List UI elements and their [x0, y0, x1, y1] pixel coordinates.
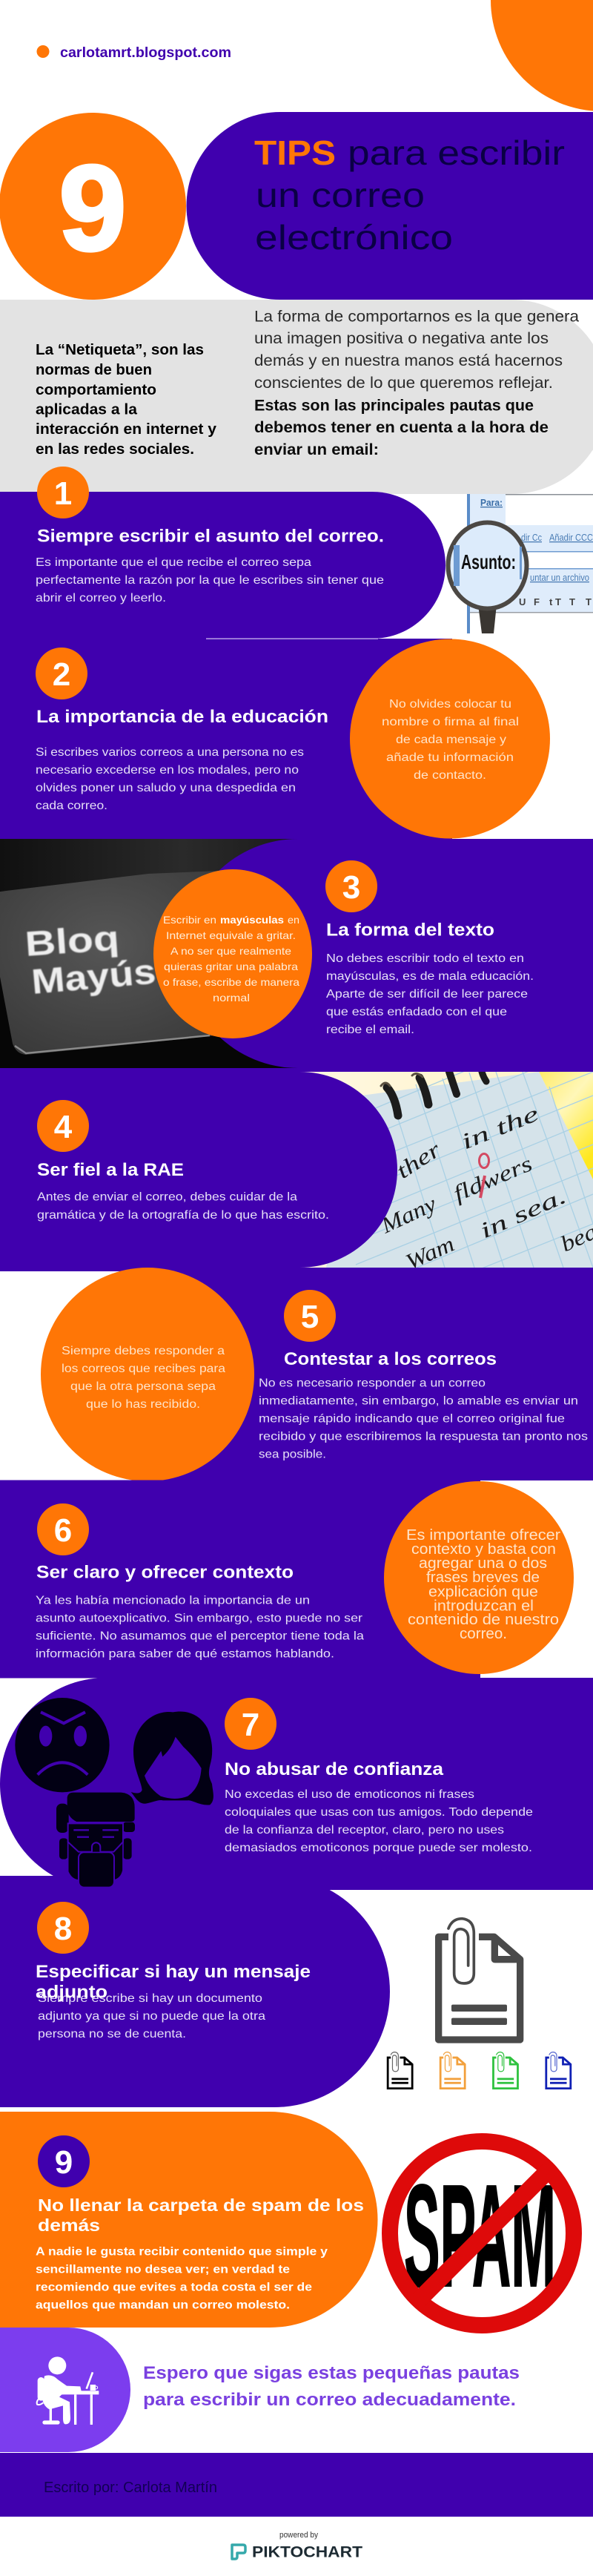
tip 6 heading: Ser claro y ofrecer contexto [36, 1562, 294, 1583]
tip 4 body: gramática y de la ortografía de lo que has escrito. [37, 1209, 329, 1222]
intro grey panel [0, 300, 593, 494]
top-right orange circle [491, 0, 593, 111]
tip 7 body [225, 1788, 533, 1854]
title panel: electrónico [255, 218, 453, 257]
callout: capital letters [153, 869, 312, 1038]
tip 4 badge: 4 [54, 1109, 73, 1145]
tip 9 badge [38, 2135, 90, 2187]
tip 7 heading: No abusar de confianza [225, 1759, 444, 1779]
footer bar [0, 2453, 593, 2517]
tip 8 body: Siempre escribe si hay un documento [38, 1992, 262, 2005]
tip 7 [225, 1698, 533, 1854]
title panel [187, 112, 593, 300]
tip 2 panel background [0, 639, 452, 839]
tip 8 body [38, 1992, 265, 2040]
tip 1 body: perfectamente la razón por la que le escribes sin tener que [36, 574, 384, 587]
intro paragraph: demás y en nuestra manos está hacernos [254, 352, 563, 369]
tip 2 badge: 2 [53, 656, 70, 693]
footer bar: Escrito por: Carlota Martín [44, 2480, 217, 2496]
tip 2 badge [36, 648, 87, 699]
callout: capital letters: Escribir en [163, 914, 216, 926]
tip 9 body: A nadie le gusta recibir contenido que simple y [36, 2246, 328, 2259]
tip 8 heading: Especificar si hay un mensaje [36, 1962, 311, 1982]
photo: magnifier over subject field: UFtTTT [519, 596, 592, 607]
photo: notebook with corrected spelling: Many [377, 1191, 440, 1239]
callout: offer context: frases breves de [426, 1569, 540, 1586]
netiqueta definition [36, 342, 217, 458]
tip 1 body [36, 556, 384, 605]
tip 4 body: Antes de enviar el correo, debes cuidar de la [37, 1191, 297, 1204]
callout: offer context: explicación que [428, 1584, 538, 1601]
callout: signature reminder: No olvides colocar tu [389, 698, 511, 711]
tip 5 body: recibido y que escribiremos la respuesta tan pronto nos [259, 1431, 588, 1443]
callout: signature reminder: de contacto. [414, 769, 486, 782]
callout: capital letters: o frase, escribe de manera [163, 976, 299, 988]
piktochart credit: PIKTOCHART [252, 2544, 362, 2561]
tip 2 body: necesario excederse en los modales, pero no [36, 764, 299, 777]
tip 4 body [37, 1191, 329, 1222]
callout: offer context: contenido de nuestro [408, 1612, 559, 1628]
tip 5 body: inmediatamente, sin embargo, lo amable es enviar un [259, 1395, 578, 1408]
tip 6 panel background [0, 1480, 480, 1678]
icon: green document [493, 2052, 517, 2089]
tip 3 badge [325, 860, 377, 912]
tip 4 [37, 1100, 329, 1222]
tip 3 [325, 860, 534, 1036]
photo: notebook with corrected spelling: Wam [402, 1232, 458, 1274]
tip 7 body: de la confianza del receptor, claro, pero no uses [225, 1824, 504, 1837]
tip 5 badge [284, 1290, 336, 1342]
callout: capital letters: en [288, 914, 299, 926]
callout: offer context: contexto y basta con [411, 1541, 556, 1558]
tip 1 heading: Siempre escribir el asunto del correo. [37, 527, 384, 547]
netiqueta definition: aplicadas a la [36, 402, 138, 418]
tip 7 panel background [0, 1678, 593, 1890]
tip 8 [36, 1902, 311, 2040]
photo: magnifier over subject field [448, 494, 593, 633]
photo: magnifier over subject field: dir Cc [521, 532, 542, 543]
tip 3 body: mayúsculas, es de mala educación. [326, 970, 534, 983]
piktochart credit [232, 2531, 362, 2561]
photo: caps lock key [0, 839, 304, 1068]
tip 7 badge: 7 [242, 1707, 259, 1743]
callout: always reply [41, 1268, 254, 1481]
tip 2 heading: La importancia de la educación [36, 707, 328, 727]
tip 9 body: sencillamente no desea ver; en verdad te [36, 2264, 290, 2276]
photo: notebook with corrected spelling: fldwers [450, 1151, 536, 1206]
tip 3 panel background [0, 839, 593, 1072]
intro paragraph: enviar un email: [254, 441, 379, 458]
tip 6 body: Ya les había mencionado la importancia de un [36, 1595, 310, 1607]
icon: woman silhouette [131, 1712, 213, 1805]
intro paragraph: una imagen positiva o negativa ante los [254, 330, 549, 347]
callout: offer context: correo. [460, 1626, 507, 1642]
tip 8 body: persona no se de cuenta. [38, 2028, 186, 2040]
tip 5 body: No es necesario responder a un correo [259, 1377, 486, 1390]
icon: orange document [440, 2052, 465, 2089]
tip 9 badge: 9 [55, 2144, 73, 2181]
tip 5 body: mensaje rápido indicando que el correo original fue [259, 1413, 565, 1426]
closing icon badge: person at desk [0, 2328, 130, 2452]
piktochart credit: powered by [279, 2531, 318, 2540]
tip 6 body: asunto autoexplicativo. Sin embargo, esto puede no ser [36, 1613, 363, 1624]
callout: capital letters: mayúsculas [220, 914, 284, 926]
callout: capital letters: A no ser que realmente [170, 945, 291, 957]
callout: signature reminder: nombre o firma al final [382, 716, 519, 728]
intro paragraph: conscientes de lo que queremos reflejar. [254, 375, 553, 392]
icons: attachment documents [388, 1919, 571, 2089]
tip 3 heading: La forma del texto [326, 920, 494, 941]
photo: notebook with corrected spelling [305, 1072, 593, 1268]
intro paragraph: La forma de comportarnos es la que genera [254, 309, 579, 325]
title panel: un correo [256, 176, 425, 214]
tip 5 body: sea posible. [259, 1449, 326, 1461]
tip 2 [36, 648, 328, 812]
intro paragraph: debemos tener en cuenta a la hora de [254, 419, 549, 436]
tip 1 badge [37, 467, 89, 518]
callout: offer context: introduzcan el [434, 1598, 534, 1614]
icon: bearded man [56, 1793, 135, 1888]
tip 5 badge: 5 [301, 1299, 319, 1335]
callout: capital letters: Internet equivale a gritar. [166, 929, 296, 941]
photo: caps lock key: Bloq [24, 918, 120, 963]
callout: always reply: los correos que recibes para [62, 1363, 225, 1375]
tip 1 body: abrir el correo y leerlo. [36, 592, 166, 605]
tip 9 body: recomiendo que evites a toda costa el ser de [36, 2282, 312, 2294]
tip 3 body: que estás enfadado con el que [326, 1006, 507, 1018]
tip 5 heading: Contestar a los correos [284, 1349, 497, 1369]
netiqueta definition: normas de buen [36, 362, 152, 378]
photo: caps lock key: Mayús [30, 952, 157, 1001]
tip 8 body: adjunto ya que si no puede que la otra [38, 2010, 265, 2023]
tip 4 panel background [0, 1068, 397, 1271]
icon: piktochart logo [232, 2545, 245, 2559]
tip 7 badge [225, 1698, 276, 1750]
callout: offer context: Es importante ofrecer [406, 1527, 560, 1544]
tip 9 heading [38, 2195, 364, 2235]
big number nine badge [0, 113, 186, 300]
tip 3 body: Aparte de ser difícil de leer parece [326, 988, 528, 1001]
tip 8 heading [36, 1962, 311, 2003]
tip 6 body: suficiente. No asumamos que el perceptor tiene toda la [36, 1630, 364, 1642]
intro paragraph: Estas son las principales pautas que [254, 398, 534, 414]
netiqueta definition: comportamiento [36, 382, 156, 398]
tip 9 body: aquellos que mandan un correo molesto. [36, 2299, 290, 2312]
tip 6 badge [37, 1503, 89, 1555]
icons: emoticon faces [15, 1698, 213, 1888]
callout: offer context [384, 1481, 574, 1674]
icon: large document with paperclip [439, 1919, 520, 2040]
closing message: Espero que sigas estas pequeñas pautas [143, 2363, 520, 2383]
tip 6 [36, 1503, 364, 1660]
tip 3 body: recibe el email. [326, 1024, 414, 1036]
closing message [143, 2363, 520, 2410]
title panel: TIPS [254, 134, 336, 172]
netiqueta definition: en las redes sociales. [36, 441, 194, 458]
netiqueta definition: La “Netiqueta”, son las [36, 342, 204, 358]
tip 2 body [36, 746, 304, 812]
tip 2 body: cada correo. [36, 800, 107, 812]
blog link header: carlotamrt.blogspot.com [60, 45, 231, 61]
closing message: para escribir un correo adecuadamente. [143, 2390, 516, 2410]
tip 8 heading: adjunto [36, 1982, 107, 2003]
photo: magnifier over subject field: Para: [480, 497, 503, 508]
photo: notebook with corrected spelling: in sea. [476, 1184, 570, 1243]
tip 3 body [326, 952, 534, 1036]
tip 1 badge: 1 [54, 475, 72, 512]
tip 5 [259, 1290, 588, 1461]
tip 4 heading: Ser fiel a la RAE [37, 1160, 184, 1180]
tip 8 badge [37, 1902, 89, 1954]
tip 8 panel background [0, 1876, 390, 2107]
tip 8 badge: 8 [54, 1911, 72, 1947]
photo: notebook with corrected spelling: in the [457, 1101, 543, 1154]
title panel: para escribir [348, 134, 565, 172]
tip 2 body: olvides poner un saludo y una despedida en [36, 782, 296, 794]
tip 9 panel [0, 2112, 378, 2328]
callout: always reply: que lo has recibido. [86, 1398, 200, 1411]
closing panel [0, 2328, 520, 2452]
icon: angry face [15, 1698, 110, 1792]
callout: signature reminder: añade tu información [386, 751, 514, 764]
tip 6 badge: 6 [54, 1512, 72, 1549]
tip 2 body: Si escribes varios correos a una persona no es [36, 746, 304, 759]
tip 1 panel background [0, 492, 445, 639]
tip 9 body [36, 2246, 328, 2312]
tip 6 body: información para saber de qué estamos hablando. [36, 1648, 334, 1660]
callout: always reply: que la otra persona sepa [70, 1380, 216, 1393]
tip 7 body: demasiados emoticonos porque puede ser molesto. [225, 1842, 532, 1854]
tip 7 body: coloquiales que usas con tus amigos. Todo depende [225, 1806, 533, 1819]
icon: blue document [546, 2052, 571, 2089]
callout: capital letters: quieras gritar una palabra [164, 961, 298, 972]
callout: offer context: agregar una o dos [419, 1555, 547, 1572]
photo: magnifier over subject field: Asunto: [461, 550, 516, 573]
big number nine badge: 9 [59, 140, 127, 276]
tip 5 panel background [0, 1268, 593, 1480]
icon: black document [388, 2052, 412, 2089]
intro paragraph [254, 309, 579, 458]
callout: capital letters: normal [213, 992, 250, 1004]
tip 4 badge [37, 1100, 89, 1152]
callout: signature reminder: de cada mensaje y [396, 734, 506, 746]
tip 9 heading: demás [38, 2216, 100, 2235]
tip 1 [36, 467, 384, 605]
callout: always reply: Siempre debes responder a [62, 1345, 225, 1357]
tip 7 body: No excedas el uso de emoticonos ni frases [225, 1788, 474, 1801]
netiqueta definition: interacción en internet y [36, 421, 217, 438]
tip 9 heading: No llenar la carpeta de spam de los [38, 2195, 364, 2215]
tip 1 body: Es importante que el que recibe el correo sepa [36, 556, 311, 569]
photo: notebook with corrected spelling: ther [392, 1137, 445, 1184]
tip 6 body [36, 1595, 364, 1660]
tip 3 body: No debes escribir todo el texto en [326, 952, 524, 965]
tip 5 body [259, 1377, 588, 1461]
tip 3 badge: 3 [342, 869, 360, 906]
callout: signature reminder [350, 639, 550, 838]
